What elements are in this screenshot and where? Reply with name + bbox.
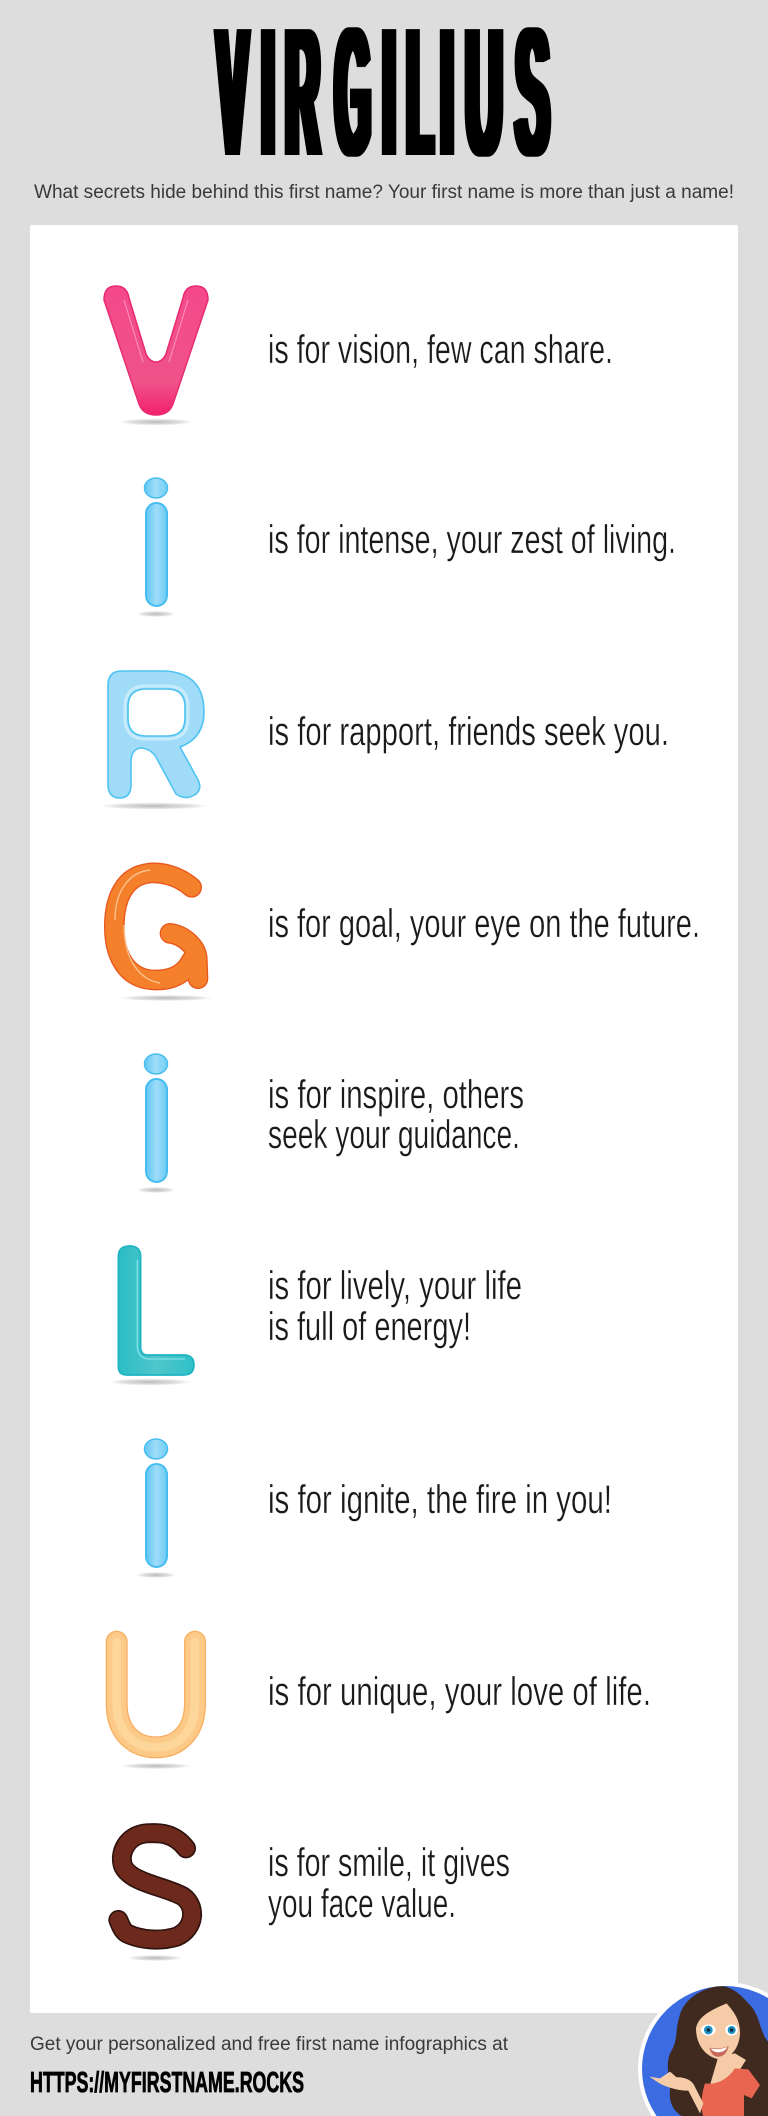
row: G xyxy=(114,870,700,1001)
row: L xyxy=(108,1246,522,1386)
title xyxy=(217,0,549,194)
icon: letter V xyxy=(104,286,208,426)
eyes xyxy=(701,2024,716,2036)
shirt xyxy=(702,2068,760,2116)
icon: letter i xyxy=(136,1054,176,1193)
icon: letter i xyxy=(136,478,176,617)
hair xyxy=(668,1986,768,2116)
icon: letter U xyxy=(117,1642,195,1769)
icon: letter S xyxy=(118,1833,192,1961)
face xyxy=(696,2003,740,2059)
row: U xyxy=(117,1642,651,1769)
row: R xyxy=(99,671,669,810)
neck xyxy=(710,2053,746,2085)
row: S xyxy=(118,1833,510,1961)
text: I second: is for inspire, others xyxy=(268,1073,524,1117)
text: L: is for lively, your life xyxy=(268,1264,522,1308)
text: L: is full of energy! xyxy=(268,1305,471,1349)
row: I third xyxy=(136,1439,612,1578)
text: S: is for smile, it gives xyxy=(268,1841,510,1885)
avatar xyxy=(638,1982,768,2116)
row: V xyxy=(104,286,613,426)
icon: letter L xyxy=(108,1246,194,1386)
text: S: you face value. xyxy=(268,1882,456,1926)
row: I second xyxy=(136,1054,524,1193)
panel: letters xyxy=(30,225,738,2013)
footer url: HTTPS://MYFIRSTNAME.ROCKS xyxy=(30,2067,304,2099)
icon: letter R xyxy=(99,671,209,810)
icon: letter G xyxy=(114,870,214,1001)
mouth xyxy=(709,2046,729,2057)
text: I second: seek your guidance. xyxy=(268,1113,520,1157)
row: I xyxy=(136,478,676,617)
arm and hand xyxy=(649,2072,703,2113)
icon: letter i xyxy=(136,1439,176,1578)
subtitle: What secrets hide behind this first name? Your first name is more than just a name! xyxy=(34,182,734,203)
footer prompt: Get your personalized and free first name infographics at xyxy=(30,2034,509,2055)
text: V: is for vision, few can share. xyxy=(268,328,613,372)
text: I third: is for ignite, the fire in you! xyxy=(268,1478,612,1522)
